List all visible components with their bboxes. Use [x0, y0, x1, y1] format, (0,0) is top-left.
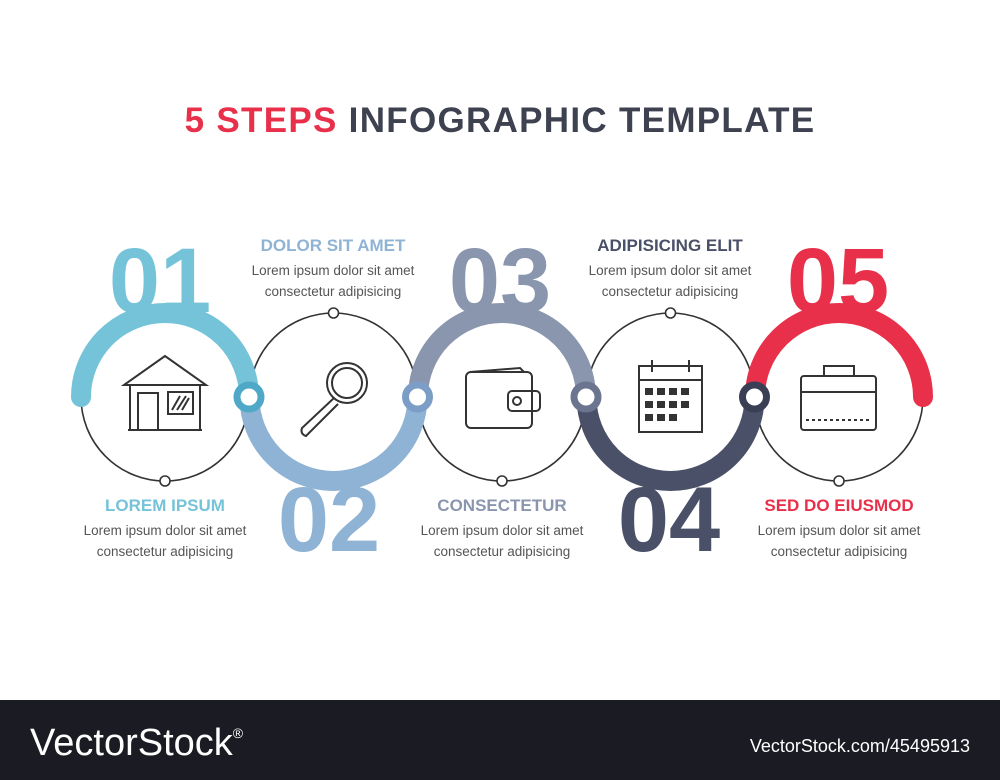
- text blocks: SED DO EIUSMOD: [764, 496, 914, 515]
- step numbers: [109, 230, 889, 571]
- text blocks: Lorem ipsum dolor sit amet: [758, 523, 921, 538]
- title: 5 STEPS INFOGRAPHIC TEMPLATE: [185, 101, 815, 140]
- text blocks: consectetur adipisicing: [602, 284, 738, 299]
- step numbers: 05: [787, 230, 889, 332]
- icon: wallet: [466, 368, 540, 428]
- icon: calendar: [639, 360, 702, 432]
- step numbers: 02: [278, 469, 380, 571]
- text blocks: Lorem ipsum dolor sit amet: [84, 523, 247, 538]
- text blocks: consectetur adipisicing: [434, 544, 570, 559]
- thin circles: [81, 313, 923, 481]
- text blocks: DOLOR SIT AMET: [261, 236, 406, 255]
- icon: briefcase: [801, 366, 876, 430]
- footer bar: ®: [233, 725, 244, 741]
- footer bar: [0, 700, 1000, 780]
- text blocks: ADIPISICING ELIT: [597, 236, 743, 255]
- text blocks: [84, 236, 921, 559]
- junction nodes: [237, 385, 766, 409]
- text blocks: consectetur adipisicing: [771, 544, 907, 559]
- text blocks: Lorem ipsum dolor sit amet: [421, 523, 584, 538]
- text blocks: consectetur adipisicing: [265, 284, 401, 299]
- icon: magnifier: [302, 363, 367, 436]
- footer bar: VectorStock.com/45495913: [750, 736, 970, 756]
- footer bar: VectorStock: [30, 722, 233, 764]
- step numbers: 03: [449, 230, 551, 332]
- icon: house: [124, 356, 206, 430]
- text blocks: CONSECTETUR: [437, 496, 567, 515]
- step numbers: 01: [109, 230, 211, 332]
- small nodes: [160, 308, 844, 486]
- text blocks: LOREM IPSUM: [105, 496, 225, 515]
- step numbers: 04: [618, 469, 720, 571]
- text blocks: consectetur adipisicing: [97, 544, 233, 559]
- text blocks: Lorem ipsum dolor sit amet: [589, 263, 752, 278]
- text blocks: Lorem ipsum dolor sit amet: [252, 263, 415, 278]
- arcs: [81, 313, 923, 481]
